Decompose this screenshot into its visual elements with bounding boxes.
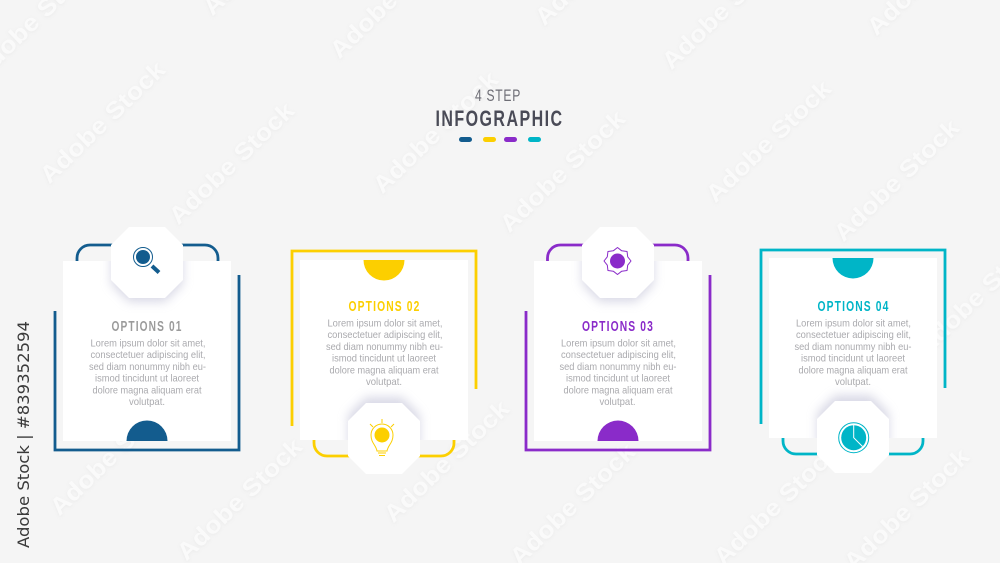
icon: clock chart [839, 423, 869, 453]
body text: ismod tincidunt ut laoreet [566, 373, 670, 385]
octagon badge [582, 227, 654, 298]
body text: sed diam nonummy nibh eu- [560, 361, 677, 373]
body text: volutpat. [129, 396, 165, 408]
title: 4 step: 4 STEP [475, 86, 521, 105]
octagon badge [348, 403, 420, 474]
watermark pattern: Adobe Stock [45, 388, 181, 521]
colour key dashes [459, 137, 541, 142]
icon: light bulb [370, 419, 394, 456]
octagon shadow [578, 261, 658, 306]
title [436, 86, 564, 142]
body text [794, 318, 912, 388]
card [769, 258, 937, 438]
card [300, 260, 468, 440]
watermark pattern: Adobe Stock [172, 433, 308, 563]
watermark pattern: Adobe Stock [495, 105, 631, 238]
body text: sed diam nonummy nibh eu- [326, 341, 443, 353]
body text: ismod tincidunt ut laoreet [95, 373, 199, 385]
body text: Lorem ipsum dolor sit amet, [90, 338, 206, 350]
semicircle tab [364, 260, 404, 280]
body text: ismod tincidunt ut laoreet [332, 353, 436, 365]
octagon shadow [107, 261, 187, 306]
panel: option 03 [526, 227, 710, 450]
body text: dolore magna aliquam erat [330, 364, 439, 376]
body text [326, 318, 443, 388]
side stock credit: Adobe Stock | #839352594 [14, 321, 33, 548]
panel: option 04 [761, 250, 945, 473]
octagon shadow [813, 391, 893, 438]
card [534, 261, 702, 441]
semicircle tab [126, 420, 168, 441]
body text: dolore magna aliquam erat [92, 384, 202, 396]
title: infographic: INFOGRAPHIC [436, 106, 564, 131]
body text: consectetuer adipiscing elit, [328, 329, 442, 341]
watermark pattern: Adobe Stock [35, 56, 171, 189]
semicircle tab [598, 421, 638, 441]
body text [89, 338, 206, 408]
frame [761, 250, 945, 454]
semicircle tab [832, 258, 874, 278]
body text [560, 338, 677, 408]
body text: Lorem ipsum dolor sit amet, [796, 318, 911, 330]
watermark pattern: Adobe Stock [701, 75, 837, 208]
body text: Lorem ipsum dolor sit amet, [561, 338, 676, 350]
body text: consectetuer adipiscing elit, [90, 349, 206, 361]
icon: badge gear [604, 248, 631, 274]
heading: OPTIONS 01 [112, 319, 182, 335]
octagon badge [111, 227, 183, 298]
watermark pattern: Adobe Stock [164, 97, 300, 230]
heading: OPTIONS 04 [818, 299, 890, 315]
panel: option 01 [55, 227, 239, 450]
watermark pattern: Adobe Stock [368, 66, 504, 199]
body text: dolore magna aliquam erat [564, 384, 673, 396]
body text: ismod tincidunt ut laoreet [801, 353, 905, 365]
body text: sed diam nonummy nibh eu- [89, 361, 206, 373]
frame [526, 245, 710, 450]
body text: dolore magna aliquam erat [798, 364, 908, 376]
body text: sed diam nonummy nibh eu- [794, 341, 912, 353]
heading: OPTIONS 02 [348, 299, 420, 315]
heading: OPTIONS 03 [582, 319, 654, 335]
body text: consectetuer adipiscing elit, [796, 329, 911, 341]
panel: option 02 [292, 251, 476, 474]
body text: consectetuer adipiscing elit, [561, 349, 676, 361]
watermark pattern: Adobe Stock [829, 114, 965, 247]
octagon badge [817, 401, 889, 473]
card [63, 261, 231, 441]
body text: Lorem ipsum dolor sit amet, [328, 318, 442, 330]
body text: volutpat. [600, 396, 636, 408]
body text: volutpat. [835, 376, 871, 388]
icon: magnifier [134, 248, 159, 272]
frame [55, 245, 239, 450]
octagon shadow [344, 393, 424, 440]
body text: volutpat. [366, 376, 402, 388]
watermark pattern: Adobe Stock [379, 395, 515, 528]
frame [292, 251, 476, 456]
